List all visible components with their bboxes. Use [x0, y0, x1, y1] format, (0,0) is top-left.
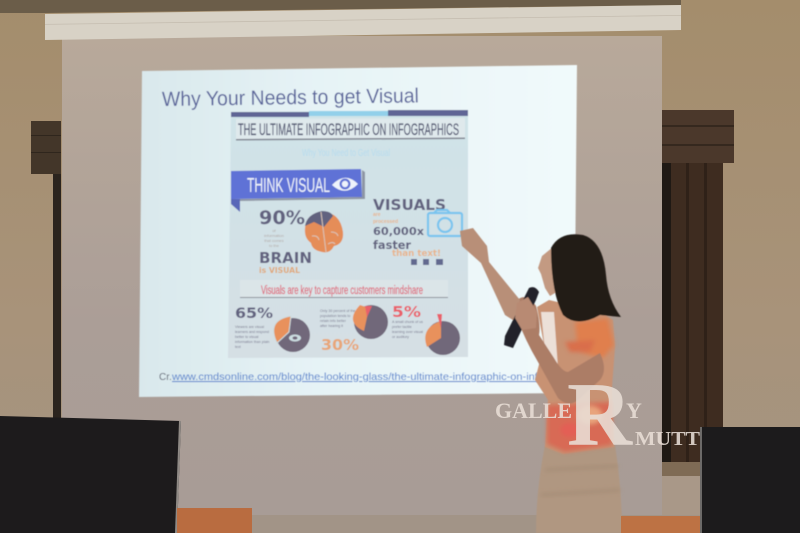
icon: brain: [305, 211, 343, 252]
stat: 5 percent with pie chart: 5%: [392, 303, 421, 321]
stat: 5 percent with pie chart: prefer tactile: [392, 325, 412, 329]
stat: 5 percent with pie chart: A small chunk of us: [392, 320, 423, 324]
banner: think visual: [231, 169, 365, 212]
stat: visuals processed faster: VISUALS: [373, 196, 446, 214]
stat: 5 percent with pie chart: [392, 303, 460, 355]
right wooden cabinet and dark curtain: [662, 110, 734, 516]
face: [538, 247, 560, 296]
microphone: [504, 287, 539, 348]
icon: eye: [332, 178, 358, 191]
stat: 65 percent with pie chart: better to visual: [235, 335, 259, 339]
orange table edge right: [621, 516, 700, 533]
icon: text glyphs: [411, 259, 443, 265]
icon: camera: [428, 210, 462, 236]
blouse: [535, 300, 615, 454]
pie chart: 5 percent: [425, 314, 460, 355]
raised pointing arm: [460, 228, 520, 322]
left wooden panel: [31, 121, 61, 418]
callout: visuals are key: Visuals are key to capture customers mindshare: [261, 285, 423, 297]
stat: 65 percent with pie chart: [235, 306, 310, 352]
stat: 30 percent with pie chart: 30%: [321, 336, 359, 354]
projected slide: [139, 65, 577, 397]
infographic subheading: Why You Need to Get Visual: [302, 147, 390, 159]
stat: 90 percent brain: to the: [269, 243, 280, 248]
watermark: gallery rmutt: GALLE: [495, 398, 572, 423]
projector screen: [62, 36, 662, 516]
slide title: Why Your Needs to get Visual: [162, 84, 419, 111]
stat: 5 percent with pie chart: learning over visual: [392, 330, 423, 334]
stat: 65 percent with pie chart: learners and respond: [235, 330, 269, 334]
stat: 90 percent brain: of: [272, 228, 277, 233]
stat: 30 percent with pie chart: Only 30 percent of the: [320, 309, 355, 313]
stat: 90 percent brain: 90%: [259, 207, 305, 229]
watermark: gallery rmutt: MUTT: [635, 428, 701, 450]
watermark: gallery rmutt: Y: [626, 398, 642, 423]
stat: visuals processed faster: than text!: [392, 249, 441, 259]
stat: visuals processed faster: 60,000x: [373, 225, 424, 238]
stat: 90 percent brain: information: [264, 233, 284, 238]
stat: 5 percent with pie chart: or auditory: [392, 335, 409, 339]
orange table edge left: [177, 508, 252, 533]
stat: visuals processed faster: faster: [373, 238, 411, 252]
stat: 30 percent with pie chart: retain info better: [320, 319, 347, 323]
stat: 90 percent brain: is VISUAL: [259, 266, 300, 275]
infographic heading: [236, 118, 465, 140]
credit line with source link: Cr.: [159, 372, 172, 383]
stat: 30 percent with pie chart: after hearing it: [320, 324, 343, 328]
infographic panel: [228, 110, 468, 358]
screen housing bar: [45, 5, 681, 40]
stat: visuals processed faster: [373, 196, 462, 265]
right monitor: [700, 427, 800, 533]
hair: [551, 234, 621, 322]
hand on microphone: [515, 297, 537, 330]
stat: visuals processed faster: are: [373, 212, 381, 218]
stat: 30 percent with pie chart: [320, 305, 388, 354]
arm holding microphone: [517, 297, 604, 404]
banner: think visual: THINK VISUAL: [247, 175, 330, 197]
stat: 65 percent with pie chart: 65%: [235, 306, 273, 322]
stat: 90 percent brain: [259, 207, 343, 275]
infographic top colour bar: [231, 110, 468, 117]
skirt: [536, 445, 622, 533]
presenter: [460, 228, 622, 533]
stat: 90 percent brain: that comes: [264, 238, 284, 243]
watermark: gallery rmutt: [495, 364, 701, 465]
watermark: gallery rmutt: R: [567, 364, 633, 465]
infographic heading: THE ULTIMATE INFOGRAPHIC ON INFOGRAPHICS: [238, 121, 459, 139]
stat: 90 percent brain: BRAIN: [259, 249, 312, 267]
stat: 65 percent with pie chart: information than plain: [235, 340, 269, 344]
callout: visuals are key: [240, 280, 448, 298]
stat: 30 percent with pie chart: population tends to: [320, 314, 350, 318]
pie chart: 65 percent: [274, 316, 310, 352]
credit line with source link: www.cmdsonline.com/blog/the-looking-glass/the-ultimate-infographic-on-info: [171, 371, 544, 383]
stat: visuals processed faster: processed: [373, 219, 398, 225]
stat: 65 percent with pie chart: text: [235, 345, 241, 349]
left monitor: [0, 416, 181, 533]
stat: 65 percent with pie chart: Viewers are visual: [235, 325, 264, 329]
pie chart: 30 percent: [353, 305, 388, 339]
